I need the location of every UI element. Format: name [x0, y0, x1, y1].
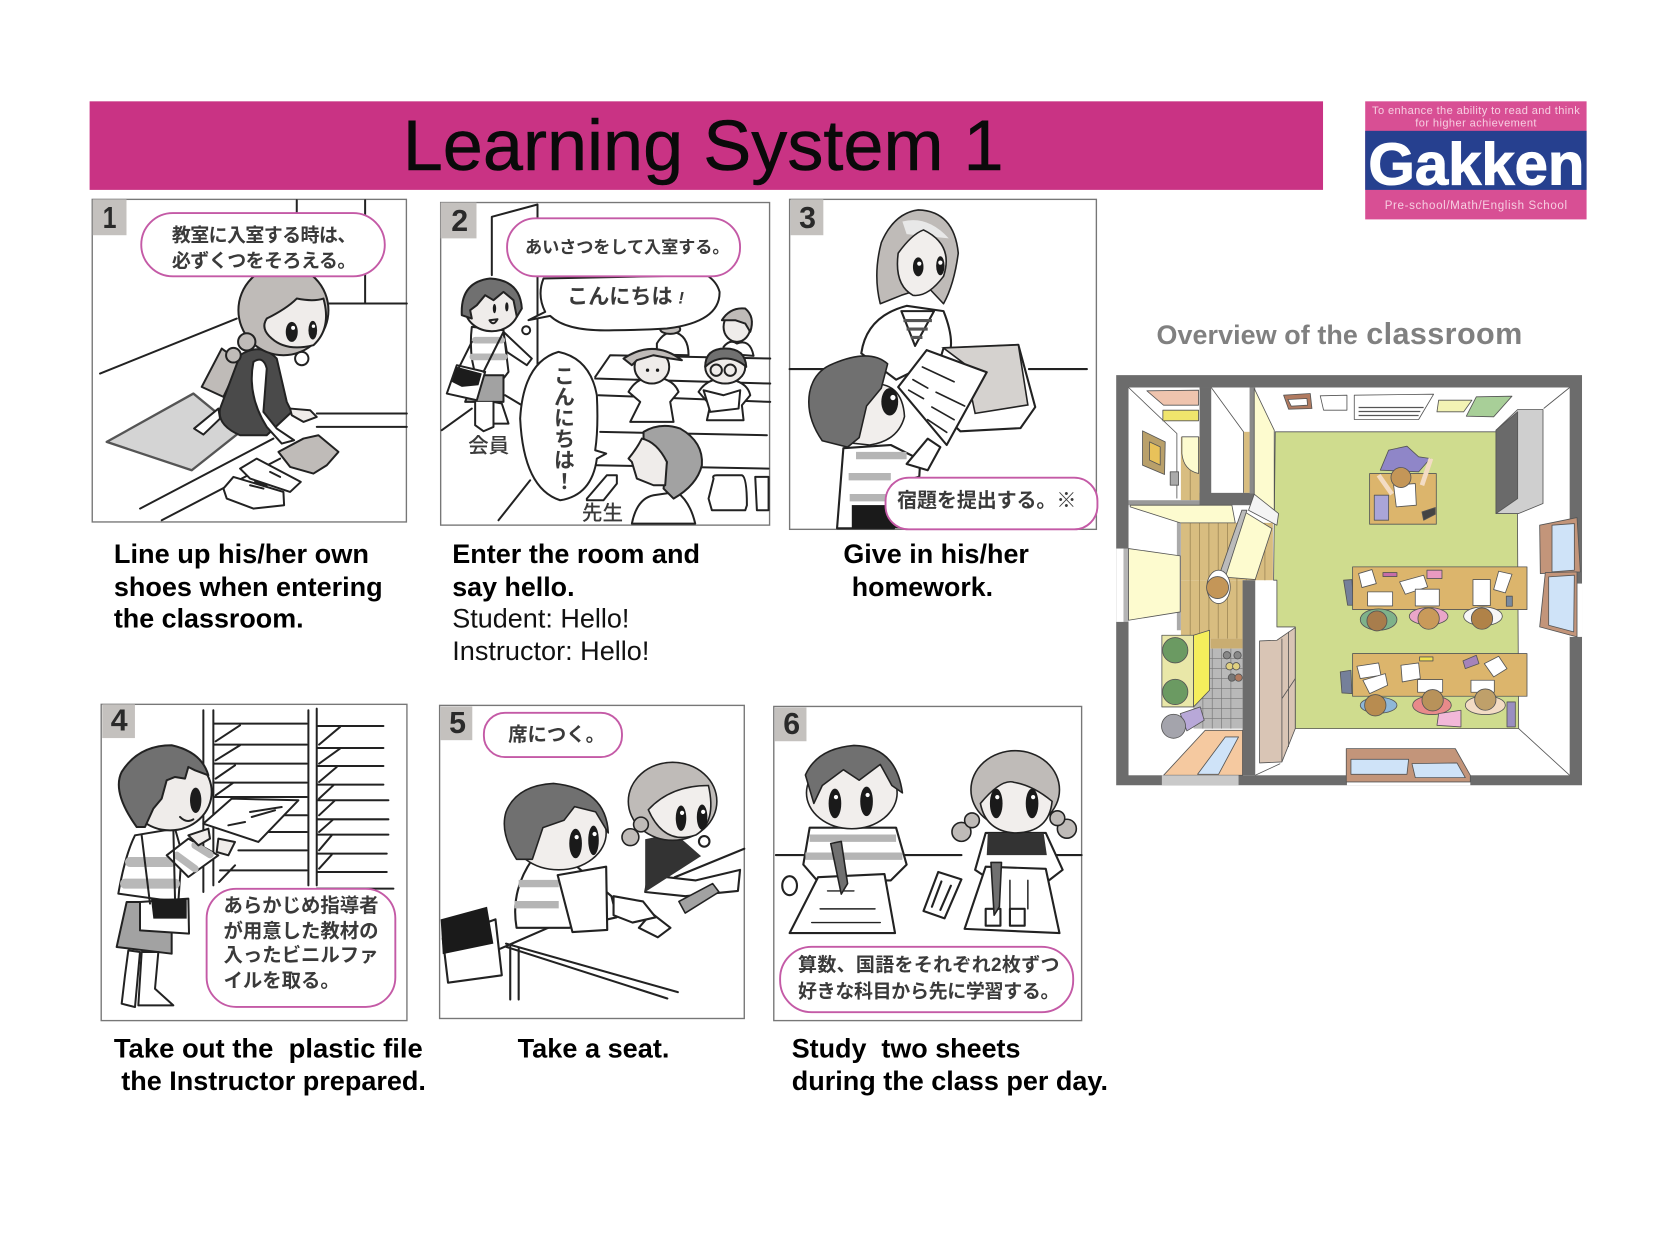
caption 4	[114, 1033, 426, 1096]
illustration: boy and shelf	[117, 709, 393, 1007]
caption bubble: 席につく。	[508, 724, 605, 746]
classroom floor plan	[1116, 375, 1582, 785]
illustration: girl tidying shoes	[100, 200, 407, 520]
logo: Gakken	[1365, 101, 1587, 219]
caption bubble: 宿題を提出する。※	[897, 489, 1076, 512]
shoes	[278, 435, 338, 474]
caption 6	[792, 1033, 1108, 1096]
logo: Gakken: for higher achievement	[1415, 118, 1537, 130]
rear student	[657, 332, 689, 355]
boy and homework	[809, 350, 987, 528]
teacher	[632, 492, 695, 524]
shoe area	[1194, 639, 1243, 729]
outer walls	[1116, 375, 1582, 785]
panel 2: enter and say hello	[441, 203, 770, 525]
speech balloon: hello	[528, 275, 720, 330]
instructor desk	[1370, 446, 1436, 524]
labels	[468, 434, 623, 525]
panel 6: study two sheets	[774, 706, 1082, 1021]
student desk row 1	[1344, 567, 1527, 631]
heading: overview of the classroom	[1156, 317, 1522, 351]
caption 4: Take out the plastic file	[114, 1033, 423, 1063]
panel 3: give in homework: 3	[799, 201, 816, 235]
caption bubble: あらかじめ指導者	[223, 894, 379, 917]
bathroom	[1129, 387, 1244, 499]
caption 4: the Instructor prepared.	[121, 1066, 426, 1096]
caption 2: Student: Hello!	[452, 603, 629, 633]
title banner	[90, 101, 1323, 190]
panel 5: take a seat: 5	[449, 706, 466, 740]
wood floor	[1181, 432, 1273, 639]
caption 2: say hello.	[452, 572, 575, 602]
panel 5: take a seat	[440, 705, 744, 1018]
boy	[803, 745, 907, 880]
left worksheet	[790, 841, 895, 933]
panel 1: line up shoes	[92, 199, 407, 522]
caption 6: during the class per day.	[792, 1066, 1108, 1096]
caption 1: shoes when entering	[114, 572, 383, 602]
speech bubble: 教室に入室する時は、	[172, 225, 356, 247]
caption 6: Study two sheets	[792, 1033, 1020, 1063]
title: Learning System 1	[403, 106, 1004, 186]
caption bubble: 好きな科目から先に学習する。	[798, 979, 1059, 1002]
boxes and eraser	[709, 475, 747, 510]
panel 6: study two sheets: 6	[783, 707, 800, 741]
teacher	[861, 210, 958, 380]
illustration: classroom greeting	[442, 204, 770, 524]
caption bubble: 入ったビニルファ	[223, 945, 379, 967]
caption bubble	[207, 889, 395, 1007]
table	[500, 849, 744, 1000]
interior walls	[1129, 387, 1255, 775]
pencil case	[923, 872, 961, 918]
heading: overview of the classroom: classroom	[1366, 317, 1522, 351]
boy	[118, 829, 182, 902]
bag	[441, 907, 502, 983]
plastic file	[203, 799, 298, 842]
right windows	[1540, 518, 1580, 637]
logo: Gakken: To enhance the ability to read and think	[1372, 105, 1580, 117]
panel 1: line up shoes: 1	[103, 201, 116, 235]
speech balloon: hello vertical	[520, 352, 606, 500]
heading: overview of the classroom: Overview of the	[1156, 320, 1358, 350]
caption bubble: が用意した教材の	[223, 919, 379, 942]
panel 4: take out plastic file	[101, 704, 407, 1021]
rolled mat	[1162, 707, 1204, 738]
labels: 先生	[582, 502, 623, 525]
speech bubble: 必ずくつをそろえる。	[172, 250, 356, 272]
caption bubble: イルを取る。	[223, 970, 340, 992]
bookcase	[1260, 628, 1295, 763]
pale yellow walls and door	[1129, 388, 1279, 620]
caption bubble	[507, 218, 740, 276]
speech text: hello: こんにちは !	[567, 286, 684, 309]
mat	[107, 394, 240, 470]
caption bubble: あいさつをして入室する。	[525, 237, 730, 257]
caption 2	[452, 539, 700, 666]
labels: 会員	[468, 434, 509, 457]
boy with glasses	[699, 379, 750, 420]
logo: Gakken: Gakken	[1368, 132, 1584, 198]
bottom window	[1346, 749, 1470, 782]
caption bubble	[780, 947, 1073, 1012]
boy	[504, 783, 719, 937]
caption 3	[843, 539, 1029, 602]
caption 1: the classroom.	[114, 603, 304, 633]
caption bubble	[484, 713, 622, 757]
panel 3: give in homework	[790, 199, 1097, 529]
caption bubble: 算数、国語をそれぞれ2枚ずつ	[798, 953, 1059, 976]
speech bubble	[141, 213, 385, 276]
girl	[622, 762, 740, 896]
caption 1	[114, 539, 383, 633]
shelf rack	[203, 709, 393, 892]
head	[238, 265, 328, 355]
boy student	[471, 327, 508, 379]
caption 2: Instructor: Hello!	[452, 636, 649, 666]
panel 2: enter and say hello: 2	[451, 204, 468, 238]
caption 5: Take a seat.	[518, 1033, 669, 1063]
panel 4: take out plastic file: 4	[111, 704, 128, 738]
caption bubble	[886, 478, 1097, 529]
logo: Gakken: Pre-school/Math/English School	[1385, 200, 1567, 212]
back boy	[724, 342, 754, 356]
box	[928, 345, 1035, 431]
right worksheet	[965, 862, 1059, 933]
shoe cabinet with plants	[1162, 630, 1210, 707]
floor	[1274, 432, 1519, 729]
caption 1: Line up his/her own	[114, 539, 369, 569]
caption 3: homework.	[852, 572, 993, 602]
person in hallway	[1207, 570, 1230, 604]
girl	[952, 751, 1076, 880]
girl student	[629, 377, 679, 422]
wall items	[1284, 393, 1512, 420]
speech text: hello vertical: こんにちは！	[551, 365, 574, 491]
entrance	[1162, 730, 1243, 785]
caption 3: Give in his/her	[843, 539, 1029, 569]
lockers	[1496, 409, 1543, 514]
student desk row 2	[1340, 654, 1527, 727]
caption 2: Enter the room and	[452, 539, 700, 569]
